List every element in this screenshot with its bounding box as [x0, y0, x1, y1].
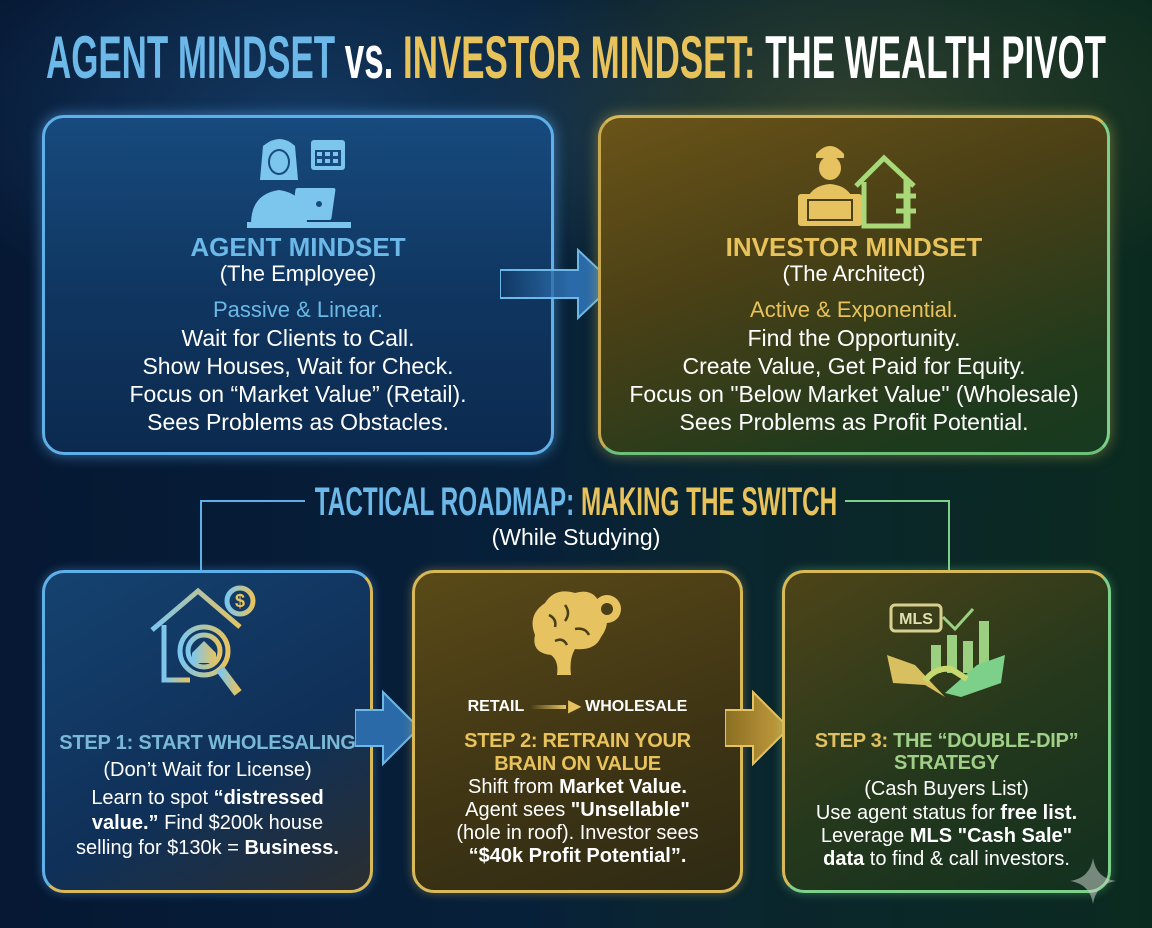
step 3 subtitle: (Cash Buyers List) — [864, 778, 1029, 800]
step 2 body: “$40k Profit Potential”. — [469, 845, 686, 867]
icon: house with magnifier — [150, 586, 256, 696]
subtitle: (The Employee) — [220, 261, 376, 286]
text block: agent traits: Sees Problems as Obstacles. — [147, 409, 449, 435]
step 2 title — [464, 730, 691, 775]
panel: step 1 — [42, 570, 373, 893]
heading: investor mindset: INVESTOR MINDSET — [726, 232, 982, 262]
step 3 title: STRATEGY — [894, 752, 999, 774]
step 3 title — [815, 730, 1078, 774]
text block: investor traits: Find the Opportunity. — [747, 325, 961, 351]
step 2 title: BRAIN ON VALUE — [494, 753, 661, 775]
step 3 body: Leverage MLS "Cash Sale" — [821, 825, 1072, 847]
arrow: step 1 to 2 — [355, 690, 412, 766]
panel: step 3 — [782, 570, 1111, 893]
text block: investor traits: Create Value, Get Paid for Equity. — [682, 353, 1026, 379]
connector bracket — [200, 500, 950, 570]
icon: sparkle watermark — [1070, 858, 1116, 904]
heading: agent mindset: AGENT MINDSET — [190, 232, 406, 262]
step 1 subtitle: (Don’t Wait for License) — [103, 759, 312, 781]
icon: MLS handshake chart: MLS — [899, 611, 933, 628]
arrow: step 2 to 3 — [725, 690, 782, 766]
text block: agent traits: Wait for Clients to Call. — [181, 325, 415, 351]
text block: investor traits — [629, 297, 1079, 435]
step 3 body — [816, 802, 1077, 870]
subtitle: while studying: (While Studying) — [492, 524, 660, 550]
icon: brain with gear — [532, 591, 621, 675]
icon: house with magnifier: $ — [235, 591, 245, 611]
arrow: agent to investor — [500, 248, 598, 320]
subtitle: (The Architect) — [782, 261, 926, 286]
step 1 body: value.” Find $200k house — [92, 812, 323, 834]
step 1 body: selling for $130k = Business. — [76, 837, 339, 859]
panel: investor mindset — [598, 115, 1110, 455]
step 1 title: STEP 1: START WHOLESALING — [59, 732, 356, 754]
icon: architect with house — [798, 146, 916, 228]
heading: tactical roadmap: TACTICAL ROADMAP: MAKING THE SWITCH — [315, 480, 837, 524]
icon: agent at desk — [247, 139, 351, 228]
step 3 body: Use agent status for free list. — [816, 802, 1077, 824]
text block: investor traits: Sees Problems as Profit Potential. — [680, 409, 1028, 435]
step 2 title: STEP 2: RETRAIN YOUR — [464, 730, 691, 752]
text block: investor traits: Active & Exponential. — [750, 297, 958, 322]
step 2 body: Agent sees "Unsellable" — [465, 799, 690, 821]
text block: agent traits: Show Houses, Wait for Check. — [142, 353, 454, 379]
panel: step 2 — [412, 570, 743, 893]
step 2 body: Shift from Market Value. — [468, 776, 687, 798]
retail to wholesale label: RETAIL ▶ WHOLESALE — [468, 698, 687, 715]
text block: agent traits — [129, 297, 466, 435]
text block: investor traits: Focus on "Below Market Value" (Wholesale) — [629, 381, 1079, 407]
step 2 body — [456, 776, 699, 867]
step 2 body: (hole in roof). Investor sees — [456, 822, 699, 844]
text block: agent traits: Focus on “Market Value” (Retail). — [129, 381, 466, 407]
text block: agent traits: Passive & Linear. — [213, 297, 383, 322]
step 1 body — [76, 787, 339, 859]
panel: agent mindset — [42, 115, 554, 455]
step 1 body: Learn to spot “distressed — [91, 787, 324, 809]
step 3 title: STEP 3: THE “DOUBLE-DIP” — [815, 730, 1078, 752]
step 3 body: data to find & call investors. — [823, 848, 1070, 870]
icon: MLS handshake chart — [887, 604, 1005, 697]
